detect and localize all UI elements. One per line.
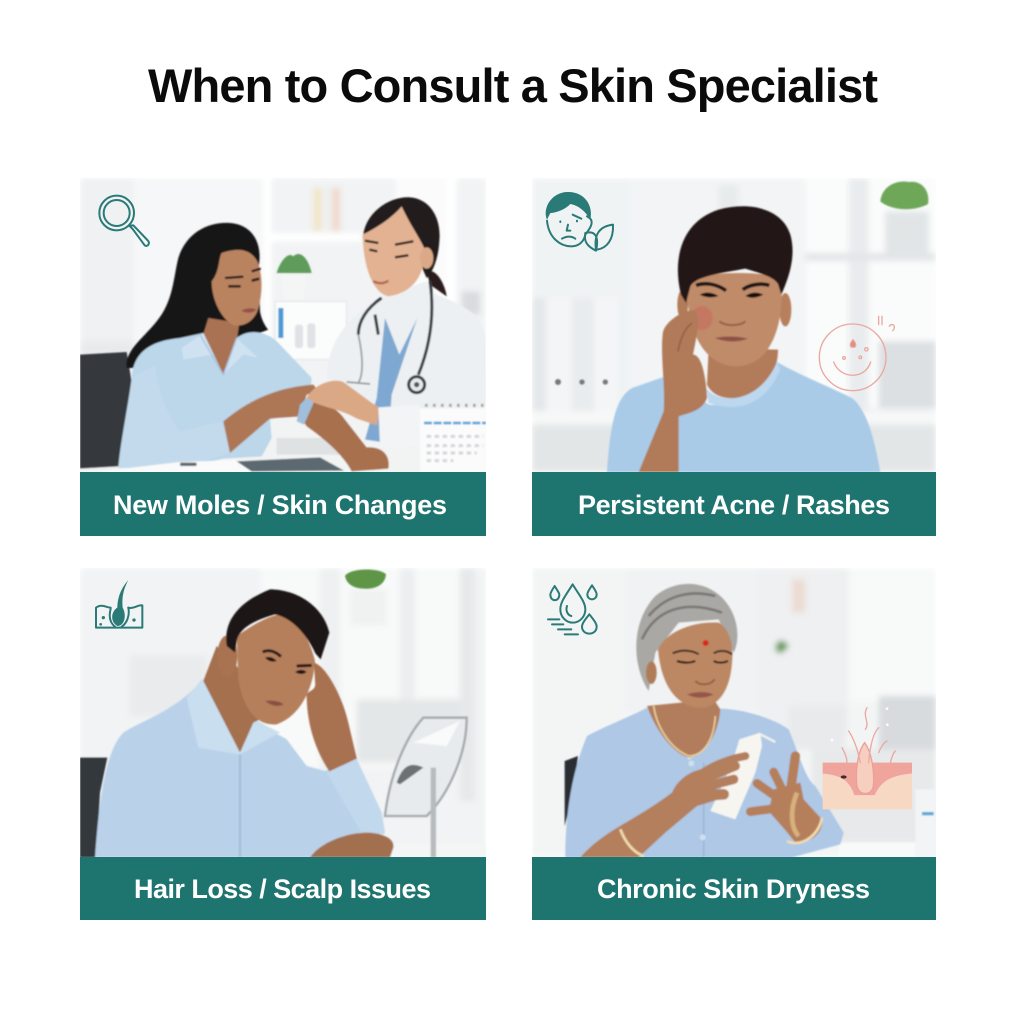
- label: new moles: New Moles / Skin Changes: [113, 490, 447, 520]
- title: When to Consult a Skin Specialist: [148, 59, 878, 112]
- hair: [226, 589, 329, 659]
- photo: man with hand at temple: [80, 568, 486, 857]
- patient face: [212, 250, 261, 326]
- patient neck: [203, 318, 239, 375]
- label: hair loss: Hair Loss / Scalp Issues: [134, 874, 431, 904]
- photo: patient and doctor: [80, 178, 486, 472]
- photo: teen with acne: [532, 178, 936, 472]
- chair: [80, 352, 137, 471]
- doctor coat: [330, 282, 486, 405]
- left hand: [750, 756, 795, 812]
- chair: [80, 758, 107, 857]
- icon: magnifying glass: [99, 196, 149, 246]
- table: [80, 418, 486, 472]
- left arm: [580, 793, 697, 857]
- neck: [203, 646, 267, 753]
- icon: skin follicle diagram: [823, 707, 912, 809]
- banner: persistent acne: [532, 472, 936, 536]
- t-shirt: [607, 362, 880, 472]
- photo: older woman with lotion: [532, 568, 936, 857]
- doctor hair: [427, 271, 447, 296]
- patient shirt: [118, 332, 312, 469]
- patient hand pointing: [223, 385, 318, 453]
- blouse: [565, 708, 844, 857]
- ear: [218, 634, 238, 666]
- face: [658, 623, 732, 708]
- label: chronic dryness: Chronic Skin Dryness: [597, 874, 870, 904]
- face: [687, 273, 781, 366]
- lotion bottle: [710, 733, 762, 819]
- plant: [277, 254, 312, 273]
- icon: face with leaf: [546, 192, 613, 251]
- banner: new moles: [80, 472, 486, 536]
- panel: hair loss / scalp issues: [80, 568, 486, 920]
- hair: [678, 206, 793, 303]
- neck: [647, 699, 720, 758]
- calendar: [915, 789, 936, 857]
- panel: chronic skin dryness: [532, 568, 936, 920]
- forearm: [304, 402, 390, 472]
- brows and eyes: [696, 284, 769, 291]
- panel: new moles / skin changes: [80, 178, 486, 536]
- icon: water drops: [548, 584, 597, 634]
- tablet and notepad: [124, 460, 246, 470]
- hand on cheek: [639, 310, 707, 472]
- shirt: [95, 676, 385, 857]
- face: [237, 614, 315, 724]
- calendar: [420, 409, 486, 472]
- panel: persistent acne / rashes: [532, 178, 936, 536]
- stethoscope: [358, 281, 432, 375]
- icon: hair follicle: [96, 580, 142, 628]
- plant: [880, 181, 928, 209]
- chair: [565, 756, 578, 826]
- patient hair: [126, 223, 268, 368]
- hand at temple: [307, 663, 357, 773]
- right hand: [689, 756, 745, 796]
- ears: [677, 289, 688, 320]
- plant: [345, 570, 386, 589]
- label: persistent acne: Persistent Acne / Rashes: [578, 490, 890, 520]
- mirror: [385, 718, 467, 816]
- patient sleeve: [117, 380, 133, 466]
- lower hand: [310, 833, 393, 857]
- doctor face: [363, 206, 425, 296]
- banner: chronic dryness: [532, 857, 936, 920]
- neck: [707, 348, 778, 398]
- eyes, mouth: [263, 651, 312, 666]
- banner: hair loss: [80, 857, 486, 920]
- hair: [636, 584, 737, 691]
- doctor hand: [307, 381, 380, 425]
- icon: acne smiley: [819, 316, 894, 391]
